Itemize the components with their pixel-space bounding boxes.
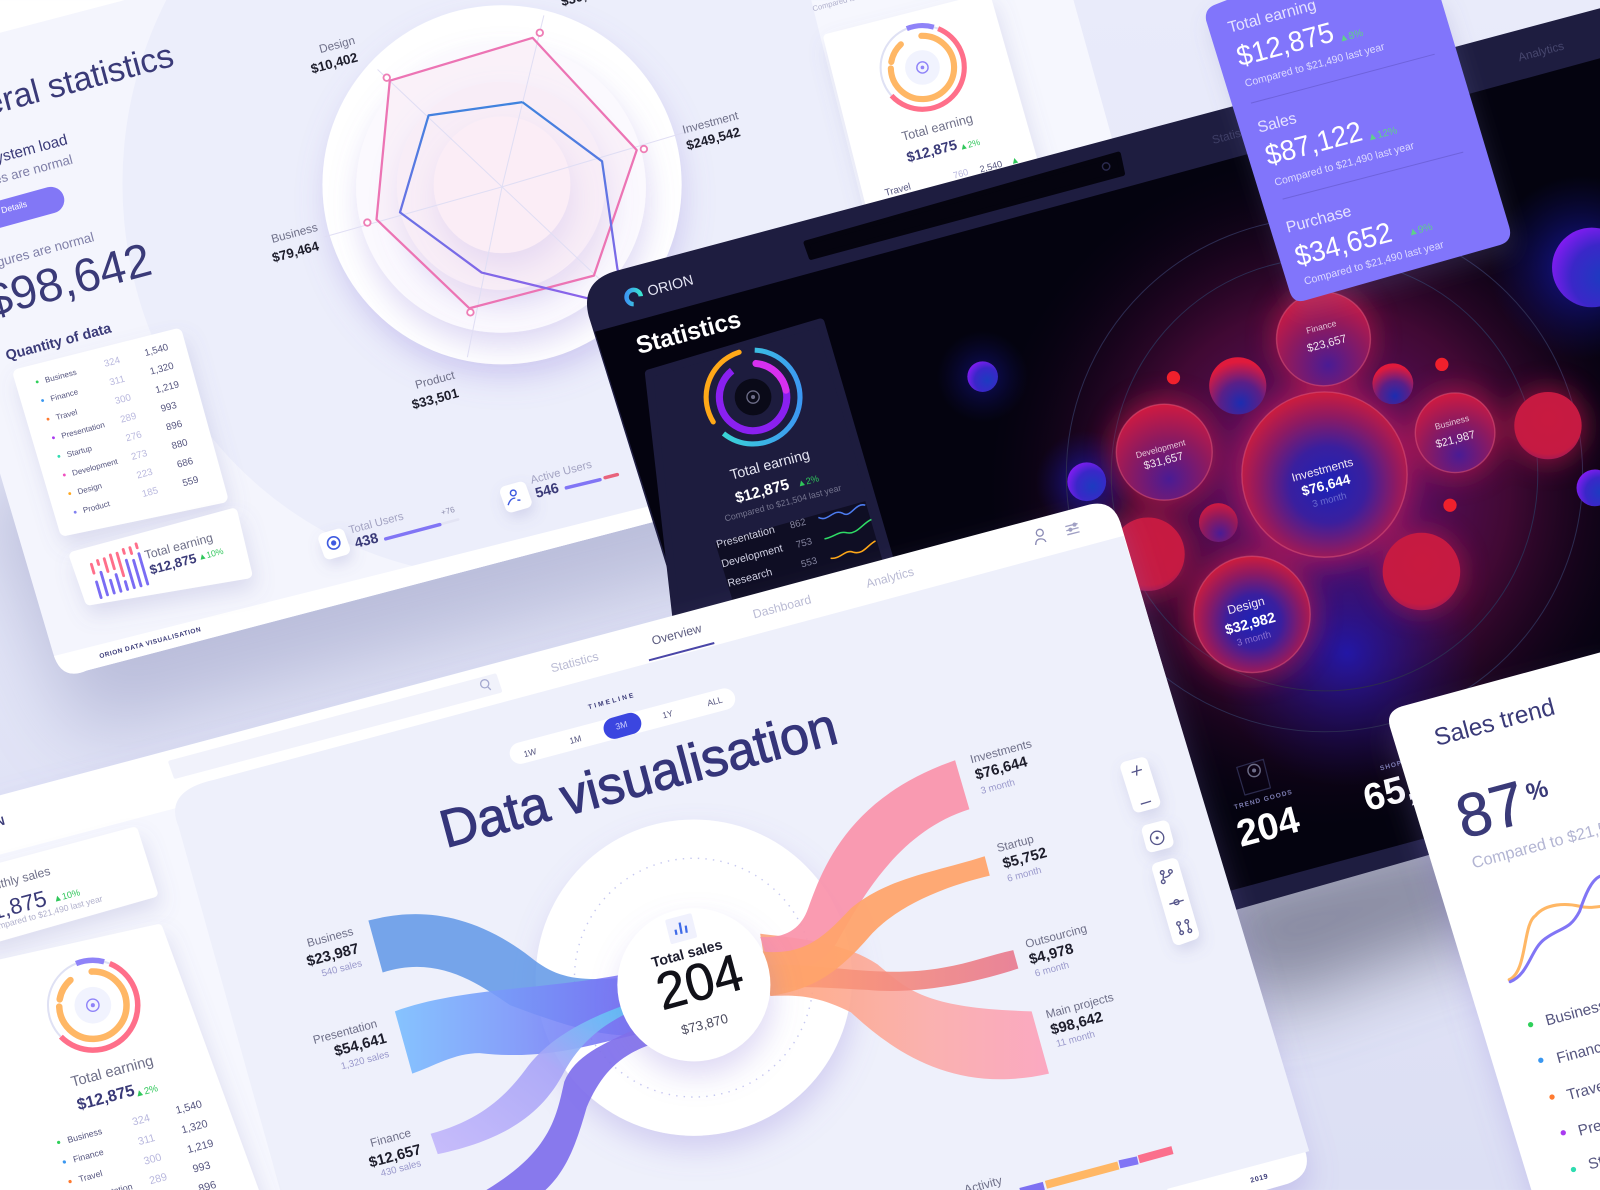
label: main projects: $98,642 xyxy=(1049,1009,1105,1039)
sidebar earning card: ▲2% xyxy=(958,137,981,152)
table rows: 1,320 xyxy=(149,361,176,378)
center title: Total sales xyxy=(650,937,724,971)
label: main projects xyxy=(1044,991,1115,1050)
table rows: 300 xyxy=(142,1151,163,1168)
table rows: Product xyxy=(82,499,112,515)
total users widget: +76 xyxy=(440,505,456,517)
metric: total earning xyxy=(1226,0,1386,90)
bubble label: design: 3 month xyxy=(1236,629,1272,649)
search bar xyxy=(806,154,1122,257)
shop stat: SHOP xyxy=(1379,760,1403,772)
sidebar earning card: Travel xyxy=(884,181,912,199)
details button: Details xyxy=(0,199,29,215)
tab: dashboard: Dashboard xyxy=(751,592,813,621)
label: investments: $76,644 xyxy=(973,754,1030,784)
metric: purchase: Compared to $21,490 last year xyxy=(1303,239,1446,288)
radar label: investment xyxy=(681,109,742,153)
sidebar earning card xyxy=(828,0,1046,260)
sidebar earning card: Total earning xyxy=(900,110,974,144)
total earning card: Total earning xyxy=(69,1053,155,1091)
footer strip xyxy=(54,506,652,674)
bubble label: design xyxy=(1223,594,1277,649)
header corner xyxy=(0,0,124,33)
label: business xyxy=(305,925,363,980)
bubble label: development: $31,657 xyxy=(1143,450,1185,472)
sidebar statistics card: Presentation xyxy=(715,524,776,551)
trend goods stat: TREND GOODS xyxy=(1233,789,1294,811)
radar label: product: $33,501 xyxy=(410,385,460,412)
sidebar statistics card: ▲2% xyxy=(796,473,820,489)
sidebar earning card: 2,540 xyxy=(979,159,1003,174)
flow: presentation xyxy=(395,975,645,1074)
total earning card: $12,875 xyxy=(148,551,198,577)
big percentage: 87 xyxy=(1449,768,1532,851)
metric: sales: Sales xyxy=(1256,110,1298,137)
radar label: business xyxy=(270,221,321,265)
label: business: 540 sales xyxy=(320,958,363,980)
sidebar statistics card: $12,875 xyxy=(733,476,792,507)
timeline selector: 1W xyxy=(522,746,538,759)
table rows: Travel xyxy=(78,1168,104,1184)
table rows: 289 xyxy=(148,1171,169,1187)
label: startup xyxy=(995,833,1049,885)
bubble chart xyxy=(944,184,1600,784)
quantity heading: Quantity of data xyxy=(4,320,114,364)
label: finance xyxy=(367,1127,423,1180)
details button xyxy=(0,199,51,223)
label: investments: Investments xyxy=(969,737,1033,766)
heading: Sales trend xyxy=(1431,694,1558,752)
radar label: investment: Investment xyxy=(681,109,741,137)
table rows xyxy=(55,1098,226,1190)
table rows: 880 xyxy=(170,437,190,452)
bubble label: business xyxy=(1434,413,1477,451)
legend xyxy=(1528,997,1600,1173)
sidebar earning card: $12,875 xyxy=(905,137,959,166)
label: main projects: 11 month xyxy=(1055,1029,1096,1050)
icon: bar chart tile xyxy=(667,915,695,942)
label: main projects: Main projects xyxy=(1044,991,1115,1021)
logo xyxy=(627,272,695,304)
metric: sales: ▲12% xyxy=(1366,125,1399,144)
tab: statistics: Statistics xyxy=(549,649,600,675)
table rows: Development xyxy=(71,457,120,478)
logo: ORION xyxy=(646,272,695,300)
bubble label: finance: Finance xyxy=(1305,318,1338,336)
total earning card: ▲2% xyxy=(134,1083,160,1100)
metric: total earning: $12,875 xyxy=(1233,17,1337,73)
tab: analytics: Analytics xyxy=(864,565,915,591)
label: presentation: 1,320 sales xyxy=(340,1049,391,1072)
total users widget: Total Users xyxy=(348,510,405,537)
timeline selector: 1M xyxy=(568,733,583,746)
timeline selector xyxy=(520,692,724,759)
table rows: 559 xyxy=(181,474,200,489)
main title: Data visualisation xyxy=(434,697,843,860)
timeline selector: 3M xyxy=(614,719,628,732)
label: investments xyxy=(969,737,1033,797)
label: startup: Startup xyxy=(995,833,1036,855)
zoom controls xyxy=(1127,763,1154,806)
bubble label: development xyxy=(1135,437,1187,472)
table rows: Finance xyxy=(72,1147,105,1164)
sidebar statistics card: 862 xyxy=(789,517,807,532)
bubble label: investments: 3 month xyxy=(1311,490,1348,510)
timeline selector: ALL xyxy=(706,694,724,708)
flow: purple main xyxy=(480,1021,663,1190)
label: finance: 430 sales xyxy=(380,1158,423,1180)
tools toolbar xyxy=(1158,864,1193,939)
metric: total earning: ▲8% xyxy=(1338,28,1365,45)
monthly sales card: ▲10% xyxy=(52,887,81,904)
shop stat: 65, xyxy=(1359,765,1420,819)
table rows xyxy=(34,342,208,518)
total earning card: ▲10% xyxy=(197,546,225,562)
table rows: 185 xyxy=(141,485,160,500)
sidebar statistics card: Compared to $21,504 last year xyxy=(723,483,842,523)
metric: sales: Compared to $21,490 last year xyxy=(1273,140,1416,189)
heading: Statistics xyxy=(633,306,744,360)
metric: purchase xyxy=(1284,203,1446,288)
flow: startup xyxy=(760,856,990,996)
metric: total earning: Compared to $21,490 last year xyxy=(1244,41,1386,90)
label: outsourcing: $4,978 xyxy=(1028,941,1075,968)
shadow under statistics panel xyxy=(0,306,918,735)
table rows: 686 xyxy=(176,456,195,471)
table rows: Startup xyxy=(66,444,93,459)
bubble label: investments: Investments xyxy=(1290,456,1355,485)
search bar xyxy=(170,676,500,777)
table rows: 1,219 xyxy=(186,1137,215,1156)
center number: 204 xyxy=(650,943,749,1022)
center amount: $73,870 xyxy=(680,1011,730,1038)
radar label: investment: $249,542 xyxy=(685,124,742,153)
table rows: 324 xyxy=(103,355,122,370)
active users widget xyxy=(506,459,617,506)
bubble label: business: Business xyxy=(1434,413,1471,432)
flow: business xyxy=(368,914,638,1035)
metric: purchase: ▲9% xyxy=(1407,222,1434,239)
dark tab: analytics: Analytics xyxy=(1517,39,1566,64)
shadow under dark panel xyxy=(1153,786,1600,1010)
large background circle xyxy=(122,0,878,577)
activity bar xyxy=(962,1150,1172,1190)
dark donut chart xyxy=(688,332,818,462)
label: business: Business xyxy=(306,925,355,950)
percent sign: % xyxy=(1523,775,1551,807)
bubble label: design: $32,982 xyxy=(1223,610,1277,639)
panel: data visualisation dashboard xyxy=(0,504,1309,1190)
radar label: business: Business xyxy=(270,221,319,246)
dotted ring xyxy=(574,858,813,1097)
table rows: 273 xyxy=(130,448,149,463)
bubble label: development: Development xyxy=(1135,437,1187,460)
bubble label: finance xyxy=(1305,318,1348,355)
metric: sales xyxy=(1256,110,1416,189)
metric: purchase: $34,652 xyxy=(1291,217,1395,273)
bubble label: finance: $23,657 xyxy=(1306,333,1348,355)
total earning card: Total earning xyxy=(143,530,215,562)
tab: overview xyxy=(649,621,714,660)
sparkline rows xyxy=(715,501,886,614)
year label: 2019 xyxy=(1249,1172,1269,1185)
panel: dark statistics dashboard xyxy=(587,8,1600,910)
radar label: design xyxy=(309,34,359,76)
label: outsourcing xyxy=(1024,922,1088,980)
label: startup: $5,752 xyxy=(1001,845,1049,872)
total earning card: $12,875 xyxy=(75,1082,137,1114)
table rows: Design xyxy=(77,481,103,496)
total earning card xyxy=(74,513,247,600)
label: presentation: $54,641 xyxy=(333,1031,388,1060)
timeline selector: 1Y xyxy=(661,708,674,720)
panel: general statistics xyxy=(0,0,1112,674)
panel: purple summary card xyxy=(1206,0,1510,301)
label: presentation xyxy=(312,1017,391,1072)
flow: main projects xyxy=(760,934,1049,1079)
radar label: business: $79,464 xyxy=(270,238,321,265)
table rows: 311 xyxy=(137,1132,157,1148)
sidebar statistics card: Research xyxy=(726,566,774,590)
table rows: Presentation xyxy=(60,420,106,441)
sidebar statistics card: 753 xyxy=(795,536,813,551)
table rows: Finance xyxy=(49,387,80,403)
label: finance: $12,657 xyxy=(367,1142,423,1171)
label: presentation: Presentation xyxy=(312,1017,379,1047)
right sidebar xyxy=(811,0,1153,306)
sidebar earning card: 760 xyxy=(952,167,969,181)
table rows: 300 xyxy=(114,392,133,407)
bubble label: design: Design xyxy=(1226,594,1266,617)
metric: purchase: Purchase xyxy=(1284,203,1353,237)
total users widget xyxy=(324,505,458,553)
icon: user xyxy=(1036,529,1046,545)
sankey backdrop circle xyxy=(536,819,852,1136)
table rows: 324 xyxy=(131,1112,152,1128)
active users widget: 546 xyxy=(534,480,561,502)
sankey flows xyxy=(368,760,1049,1190)
icon: target button xyxy=(1148,827,1167,846)
total users widget: 438 xyxy=(353,530,380,552)
left sidebar area xyxy=(0,808,290,1190)
label: business: $23,987 xyxy=(305,941,361,970)
table rows: Business xyxy=(66,1126,104,1145)
table rows: 1,540 xyxy=(174,1098,204,1117)
active users widget: Active Users xyxy=(529,459,594,487)
timeline selector: TIMELINE xyxy=(587,692,637,711)
label: startup: 6 month xyxy=(1006,865,1043,885)
tab: overview: Overview xyxy=(650,621,703,648)
sidebar statistics card: Development xyxy=(720,542,784,570)
dark tab: statistics: Statistics xyxy=(1211,122,1259,147)
sidebar statistics card: Total earning xyxy=(729,447,812,484)
footer label: ORION DATA VISUALISATION xyxy=(99,626,202,660)
trend goods stat: 204 xyxy=(1232,798,1304,855)
content area xyxy=(175,536,1309,1190)
monthly sales card xyxy=(0,832,153,941)
label: investments: 3 month xyxy=(980,777,1016,797)
trend goods stat xyxy=(1232,759,1304,855)
radar label: product: Product xyxy=(414,369,457,392)
table rows: 289 xyxy=(119,411,138,426)
flow: outsourcing xyxy=(765,950,1018,991)
bubble label: business: $21,987 xyxy=(1434,429,1477,451)
sidebar statistics card xyxy=(649,323,902,663)
light donut chart xyxy=(868,13,977,122)
flow: finance xyxy=(431,1005,629,1154)
panel: sales trend xyxy=(1389,649,1600,1190)
trend lines xyxy=(1509,876,1600,982)
radar label: design: Design xyxy=(318,34,356,56)
total earning card xyxy=(0,929,259,1190)
radar label: design: $10,402 xyxy=(309,50,359,76)
center circle xyxy=(617,908,770,1061)
table card xyxy=(19,335,221,530)
table rows: Business xyxy=(44,368,78,385)
sidebar statistics card: 553 xyxy=(800,556,818,570)
table rows: 1,540 xyxy=(143,342,170,359)
radar chart xyxy=(322,5,684,364)
bubble label: investments: $76,644 xyxy=(1300,471,1352,499)
radar label: product xyxy=(410,369,460,412)
donut chart xyxy=(34,947,151,1064)
table rows: Travel xyxy=(55,408,79,422)
table rows: 896 xyxy=(165,419,184,433)
label: outsourcing: 6 month xyxy=(1034,960,1070,980)
table rows: 1,219 xyxy=(154,379,181,396)
metric: sales: $87,122 xyxy=(1262,116,1366,172)
table rows: 223 xyxy=(135,467,154,481)
label: finance: Finance xyxy=(369,1127,412,1150)
table rows: 993 xyxy=(160,400,178,415)
label: outsourcing: Outsourcing xyxy=(1024,922,1088,951)
table rows: 1,320 xyxy=(180,1118,209,1136)
table rows: 311 xyxy=(108,374,126,388)
flow: investments xyxy=(760,760,969,971)
mini bar chart xyxy=(89,544,148,598)
table rows: 993 xyxy=(191,1159,212,1176)
bubble label: investments xyxy=(1290,456,1355,510)
icon: sliders xyxy=(1065,523,1080,535)
sidebar earning card: ▲ xyxy=(1009,154,1021,166)
table rows: 276 xyxy=(125,429,143,444)
